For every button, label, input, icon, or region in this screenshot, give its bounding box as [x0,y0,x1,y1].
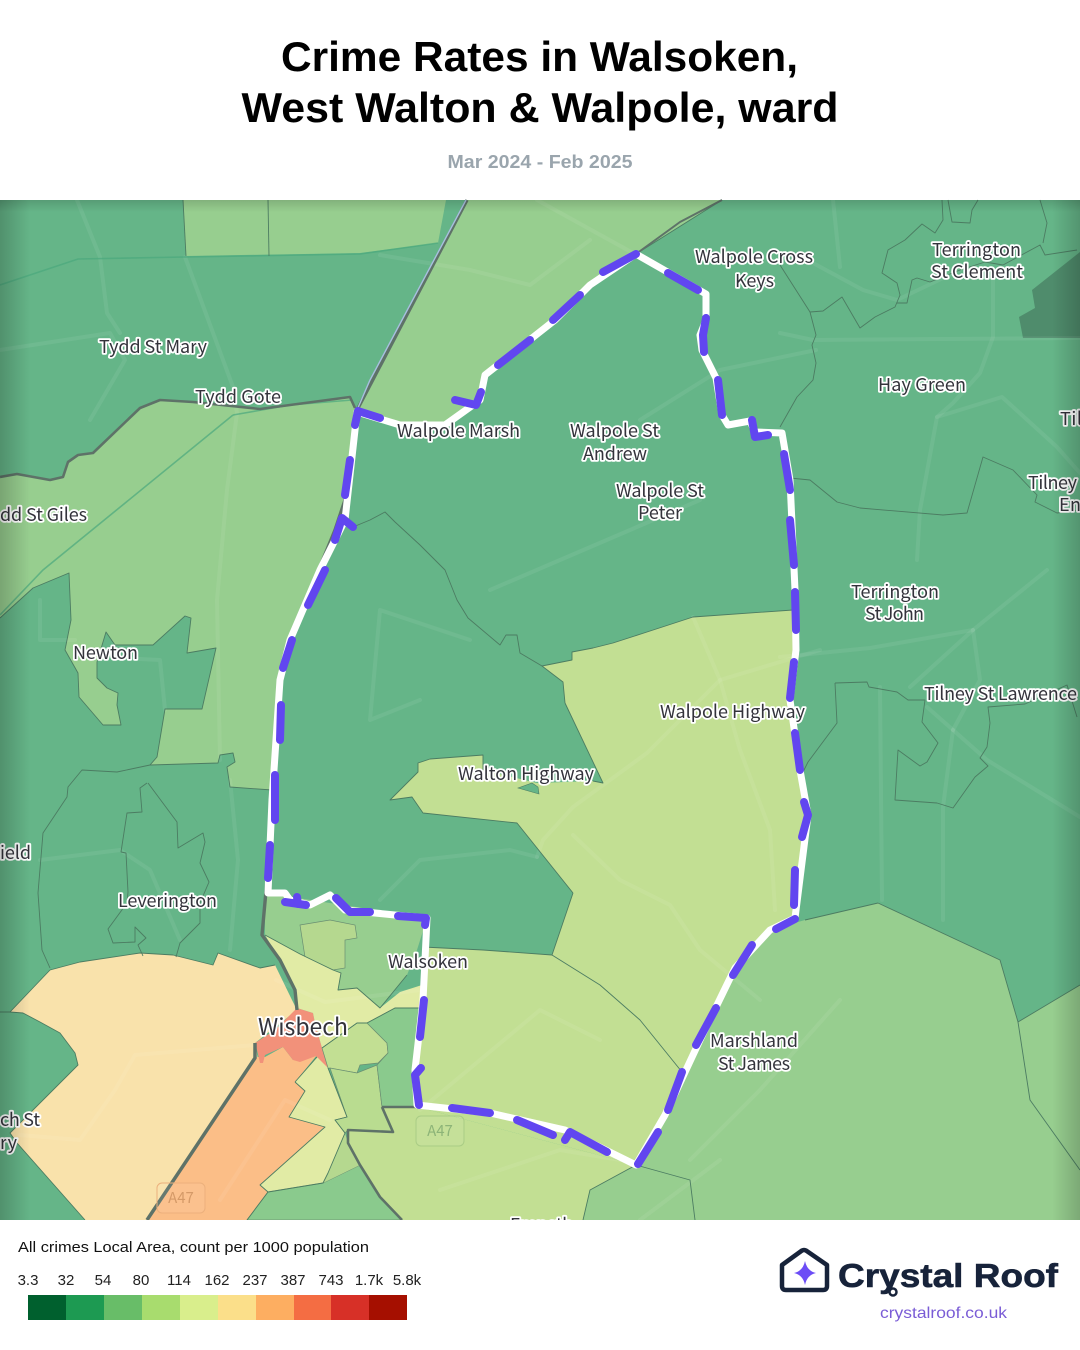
place name labels: ch St [0,1106,40,1132]
place name labels: Walton Highway [458,760,595,786]
place name labels: Walsoken [388,948,468,974]
area: Wisbech south yellow-green [260,1057,347,1192]
place name labels: Terrington [851,578,939,604]
area: Wisbech yellow-green [265,935,422,1048]
place name labels [0,236,1080,1237]
area: small green notch at Walton Highway [518,783,539,794]
legend scale labels: 3.3 [18,1272,38,1289]
legend [18,1240,422,1320]
place name labels: Walpole Cross [695,243,813,269]
road shield: A47 west [157,1183,205,1213]
legend scale labels: 32 [58,1272,74,1289]
legend scale labels: 237 [242,1272,268,1289]
road shield: A47 east [416,1116,464,1146]
map base: lowest-band green area [0,200,1080,1220]
minor roads [0,200,1080,1220]
place name labels: Walpole Marsh [397,417,520,443]
legend scale labels: 54 [95,1272,111,1289]
area: south pale green [348,1107,636,1220]
place name labels: ry [0,1129,18,1155]
area: red-orange band Wisbech centre [255,1008,328,1070]
place name labels: dd St Giles [0,501,87,527]
website link: crystalroof.co.uk [880,1305,1008,1322]
footer panel [0,1220,1080,1350]
parish boundary lines [0,200,1080,1220]
place name labels: St John [865,600,924,626]
place name labels: Emneth [510,1211,573,1237]
area: Walpole Highway pale green [390,610,808,1165]
area: top-left light green [183,200,446,256]
area: small pale sliver [323,1133,360,1183]
logo wordmark: Crystal Roof [838,1257,1059,1294]
road shield: A47 west: A47 [168,1187,194,1208]
place name labels: Tydd St Mary [99,333,208,359]
place name labels: Tilney St Lawrence [924,680,1077,706]
title: Crime Rates in Walsoken, [281,33,798,80]
place name labels: Newton [73,639,138,665]
logo: Crystal Roof [782,1250,1059,1322]
area: Wisbech east pale green [322,1023,388,1073]
title [242,33,838,131]
railway/road highlight along boundary [357,200,466,410]
ward boundary: purple dashes [268,254,808,1164]
place name labels: Terrington [932,236,1021,262]
place name labels: Walpole St [570,417,659,443]
area: dark green band at Terrington [1019,252,1080,338]
place name labels: Andrew [583,440,647,466]
legend scale labels: 387 [280,1272,306,1289]
area: Elm green [247,1165,402,1220]
area: Wisbech north inner patch [300,920,357,970]
legend scale labels: 114 [167,1272,191,1289]
icon: key drop on wordmark [890,1288,896,1296]
area: north light green wedge [357,200,722,425]
area: orange band [147,1047,325,1220]
legend colour scale [28,1295,407,1320]
place name labels: ield [0,839,31,865]
legend title: All crimes Local Area, count per 1000 population [18,1240,369,1256]
subtitle: date range: Mar 2024 - Feb 2025 [448,152,632,172]
place name labels: Tydd Gote [195,383,281,409]
place name labels: Walpole St [616,477,704,503]
place name labels: Marshland [710,1027,798,1053]
title: West Walton & Walpole, ward [242,84,838,131]
icon: house outline with star [782,1250,827,1290]
place name labels: Hay Green [878,371,966,397]
legend scale labels: 743 [318,1272,344,1289]
area: west light green [0,397,355,790]
legend scale labels [18,1272,422,1289]
area: west beige high band [10,953,297,1220]
place name labels: Wisbech [258,1008,348,1042]
thick administrative boundaries [0,200,722,1220]
legend scale labels: 162 [204,1272,230,1289]
area: south-east light green [583,903,1080,1220]
ward boundary: white line [268,254,808,1165]
place name labels: St Clement [931,258,1023,284]
road shield: A47 east: A47 [427,1120,453,1141]
legend scale labels: 1.7k [355,1272,384,1289]
area: Wisbech north light green [265,893,427,1008]
place name labels: Peter [638,499,683,525]
area: Walsoken green [367,1008,420,1107]
place name labels: Leverington [118,887,217,913]
legend scale labels: 80 [133,1272,149,1289]
area: Wisbech south-east pale green [330,1065,393,1133]
place name labels: Keys [735,267,774,293]
place name labels: Tilney [1028,469,1078,495]
river and drain lines [0,243,438,615]
map edge vignette [0,200,1080,1220]
place name labels: St James [718,1050,790,1076]
legend scale labels: 5.8k [393,1272,422,1289]
place name labels: Walpole Highway [660,698,806,724]
panel: choropleth map [0,200,1080,1237]
